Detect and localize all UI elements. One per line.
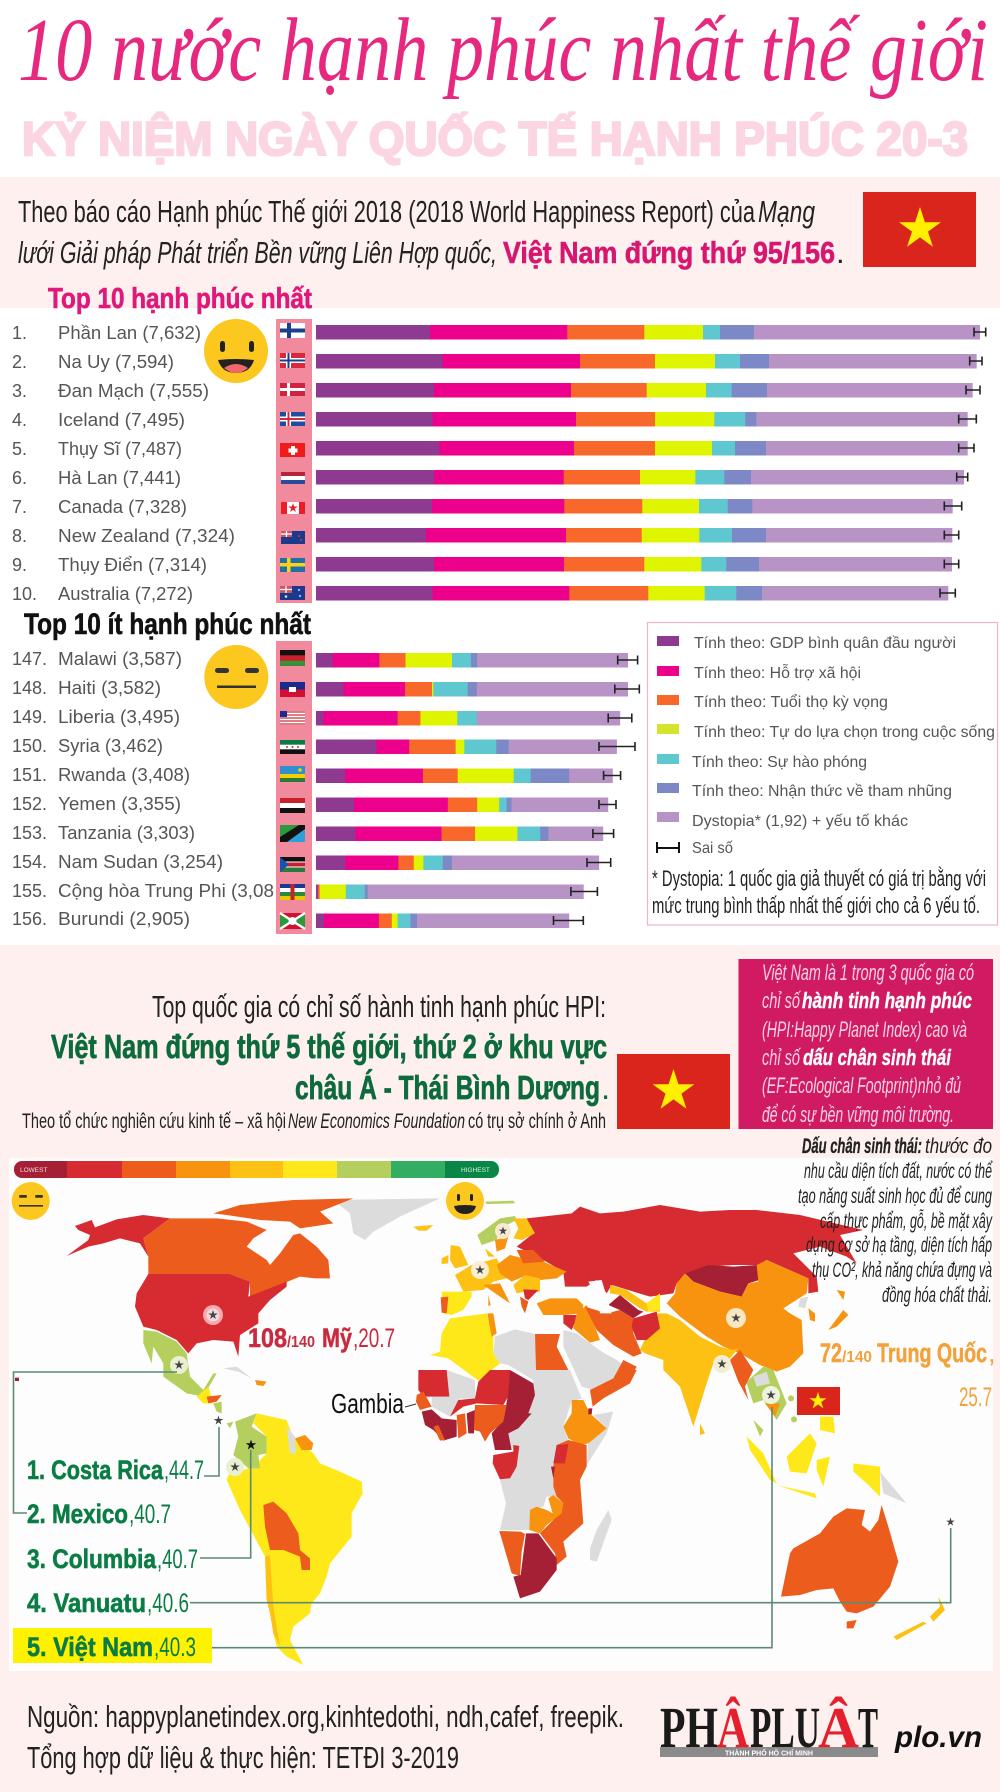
logo: Pháp Luật [660,1695,878,1760]
logo: Pháp Luật: Â [717,1695,749,1760]
panel: least happy country list: 151. [12,765,47,785]
heading: HPI section [22,989,610,1133]
bar: Thụy Sĩ [316,441,974,456]
panel: least happy country list: Tanzania (3,303) [58,823,195,843]
flag: Sweden [280,558,305,572]
panel: happiest country list: 9. [12,555,27,575]
panel: least happy country list: Cộng hòa Trung Phi (3,08 [58,881,274,901]
panel: happiest country list: 7. [12,497,27,517]
flag: Switzerland [280,443,305,457]
grey Africa [500,1370,582,1530]
flag: Iceland [280,412,305,426]
panel: happiest country list: 6. [12,468,27,488]
intro text block: Mạng [758,194,815,229]
panel: least happy country list: 156. [12,909,47,929]
chart: stacked bars top 10 [316,325,986,600]
logo: Pháp Luật: PH [660,1695,718,1760]
intro text block [18,194,845,270]
panel: happiest country list: Hà Lan (7,441) [58,468,181,488]
color scale bar: LOWEST [20,1167,47,1174]
legend: corruption: Tính theo: Nhận thức về tham nhũng [692,783,952,800]
Russia [517,1205,863,1297]
map markers [170,1223,955,1526]
Ethiopia [563,1400,607,1445]
heading: HPI section: Top quốc gia có chỉ số hành tinh hạnh phúc HPI: [152,989,606,1024]
flag: Liberia [280,711,305,725]
flag: Finland [280,323,305,338]
panel: least happy country list: 150. [12,736,47,756]
flag column top 10 [276,319,312,603]
connector: Colombia [200,1450,251,1558]
color scale bar: HIGHEST [461,1167,490,1174]
bar: Hà Lan [316,470,968,484]
bar: Malawi [316,653,638,668]
South Africa [513,1533,557,1598]
France Germany [455,1258,507,1292]
Niger [450,1370,510,1417]
flag column bottom 10 [276,641,312,934]
panel: least happy country list: Yemen (3,355) [58,794,181,814]
Balkans [523,1289,538,1300]
panel: happiest country list: 10. [12,584,37,604]
bar: Rwanda [316,768,621,783]
legend note [652,866,986,918]
chart: stacked bars bottom 10 [316,653,639,928]
Afghanistan [632,1312,660,1340]
world map [15,1198,945,1665]
heading: HPI section: châu Á - Thái Bình Dương [295,1069,600,1106]
connector: Vanuatu [190,1528,951,1603]
panel: happiest country list: Australia (7,272) [58,584,193,604]
heading: top 10 least happy: Top 10 ít hạnh phúc nhất [24,608,311,641]
label: China: , [988,1338,996,1368]
Mexico [143,1330,217,1397]
panel: least happy country list: Liberia (3,495) [58,707,180,727]
East Africa [540,1440,587,1565]
map: Sub-Saharan Africa [416,1370,637,1598]
callout: Vietnam HPI: dấu chân sinh thái [803,1045,952,1070]
bar: Syria [316,740,635,754]
panel: happiest country list: 5. [12,439,27,459]
bar: Đan Mạch [316,383,980,398]
Senegal Gambia [416,1392,432,1410]
Yemen south coast [590,1370,637,1407]
Mali [432,1370,475,1417]
rank 2: ,40.7 [129,1499,171,1529]
legend: generosity: Tính theo: Sự hào phóng [692,754,867,771]
Canada [143,1218,330,1297]
bar: Na Uy [316,354,982,368]
legend: freedom: Tính theo: Tự do lựa chọn trong cuộc sống [694,724,995,741]
Indonesia [747,1417,907,1503]
logo: Pháp Luật: PLU [750,1695,820,1760]
bar: Yemen [316,798,616,812]
Mongolia [685,1265,770,1297]
icon: Vietnam flag [863,192,976,267]
India [640,1313,738,1427]
bar: Nam Sudan [316,856,611,870]
Guyana [287,1427,296,1453]
rank 3: 3. Columbia [27,1544,157,1574]
icon: happy face small [446,1182,484,1220]
map: Australia and New Zealand [781,1505,945,1640]
connector: Vietnam [212,1407,772,1648]
rank 1: 1. Costa Rica [27,1455,164,1485]
Guinea [422,1409,457,1441]
map: Europe, Middle East, North Africa [413,1201,660,1390]
Bolivia [263,1502,310,1570]
Turkey [537,1298,583,1315]
icon: neutral face [204,645,268,709]
panel: happiest country list: 3. [12,381,27,401]
label: USA: /140 [287,1334,315,1351]
footer sources: Tổng hợp dữ liệu & thực hiện: TETĐI 3-2019 [27,1740,459,1775]
Colombia [233,1413,267,1468]
bar: Iceland [316,412,976,426]
bar: Thụy Điển [316,557,959,572]
panel: least happy country list: 152. [12,794,47,814]
panel: least happy country list: Rwanda (3,408) [58,765,190,785]
China [667,1260,808,1372]
heading: HPI section: Theo tổ chức nghiên cứu kinh tế – xã hội [22,1110,286,1133]
panel: happiest country list: 8. [12,526,27,546]
panel: least happy country list: 149. [12,707,47,727]
panel: happiest country list: Thụy Điển (7,314) [58,555,207,575]
flag: South Sudan [280,857,305,872]
panel: least happy country list: 154. [12,852,47,872]
panel: happiest country list: Phần Lan (7,632) [58,323,201,343]
icon: happy face [204,319,268,383]
icon: neutral face small [12,1182,50,1220]
connector: Mexico [14,1372,177,1513]
rank 4: ,40.6 [147,1588,189,1618]
flag: Netherlands [281,472,305,484]
flag: Denmark [280,383,305,396]
flag: Yemen [280,798,305,813]
heading: HPI section: Việt Nam đứng thứ 5 thế giới, thứ 2 ở khu vực [51,1028,607,1065]
Zambia [529,1495,563,1533]
Sahara grey [493,1329,577,1390]
Congo [493,1445,519,1479]
Ghana [457,1413,467,1438]
Italy [483,1283,510,1303]
bar: Phần Lan [316,325,986,340]
intro text block: lưới Giải pháp Phát triển Bền vững Liên Hợp quốc, [18,235,497,270]
label: China [820,1338,996,1412]
bar: Cộng hòa Trung Phi [316,884,597,899]
map: South America [227,1413,363,1665]
Central Asia [610,1285,660,1312]
rank 3: ,40.7 [157,1544,198,1574]
color scale bar [14,1161,499,1178]
Suriname [295,1435,313,1450]
panel: least happy country list: 147. [12,649,47,669]
flag: Rwanda [280,766,305,782]
legend: GDP: Tính theo: GDP bình quân đầu người [694,635,956,652]
Mauritania [418,1370,449,1397]
Arabia [563,1330,627,1390]
logo: plo.vn: plo.vn [894,1721,982,1754]
highlight: Vietnam label [13,1628,212,1663]
Arctic islands [213,1198,353,1228]
logo: Pháp Luật: THÀNH PHỐ HỒ CHÍ MINH [725,1748,813,1758]
Namibia [499,1531,525,1576]
connector: Costa Rica [204,1427,219,1476]
intro text block: Việt Nam đứng thứ 95/156 [503,235,835,270]
callout: Vietnam HPI: chỉ số [762,1045,801,1070]
Egypt [535,1334,568,1370]
label: USA [248,1323,395,1353]
Japan Korea [798,1290,848,1330]
flag: Central African Republic [280,884,305,900]
map: North and Central America [15,1198,440,1428]
panel: least happy country list: 148. [12,678,47,698]
Oman Yemen [590,1360,637,1390]
panel: least happy country list: Malawi (3,587) [58,649,182,669]
icon: Vietnam flag small [797,1387,840,1415]
flag: New Zealand [281,531,305,544]
label: USA: Mỹ [322,1323,352,1353]
UK Ireland [450,1245,468,1268]
Iraq [573,1305,600,1343]
bar: Liberia [316,711,632,726]
panel: happiest country list: Na Uy (7,594) [58,352,174,372]
rank 1: ,44.7 [164,1455,204,1485]
panel: least happy country list: Haiti (3,582) [58,678,161,698]
Caspian [588,1280,612,1313]
label: Gambia: Gambia [331,1388,404,1419]
Algeria [417,1313,500,1381]
bar: Haiti [316,682,639,696]
panel: happiest country list: New Zealand (7,324) [58,526,235,546]
heading: top 10 happiest: Top 10 hạnh phúc nhất [48,283,312,315]
panel: happiest country list: 4. [12,410,27,430]
Greenland [333,1198,440,1240]
flag: Burundi [280,913,305,929]
icon: Vietnam flag large [617,1054,730,1129]
callout: Vietnam HPI: chỉ số [762,988,801,1013]
bar: Burundi [316,914,583,928]
panel: least happy country list: Burundi (2,905) [58,909,190,929]
heading: HPI section: có trụ sở chính ở Anh [468,1110,606,1133]
legend: life expectancy: Tính theo: Tuổi thọ kỳ vọng [694,693,888,711]
Spain [442,1292,472,1315]
list: top 5 HPI countries [27,1455,204,1662]
map background [9,1158,993,1671]
panel: happiest country list: 1. [12,323,27,343]
panel: least happy country list: 153. [12,823,47,843]
panel: least happy country list: 155. [12,881,47,901]
bar: Australia [316,586,955,600]
label: China: /140 [842,1349,872,1366]
Chad [492,1370,535,1450]
rank 5: ,40.3 [154,1632,196,1662]
Scandinavia [477,1216,517,1245]
heading: HPI section: New Economics Foundation [288,1110,465,1133]
flag: Tanzania [280,825,305,842]
flag: Norway [280,353,305,368]
flag: Australia [280,586,305,600]
heading: HPI section: . [601,1069,610,1106]
rank 4: 4. Vanuatu [27,1588,146,1618]
panel: happiest country list: Đan Mạch (7,555) [58,381,209,401]
Iran [585,1307,642,1357]
label: USA: ,20.7 [353,1323,395,1353]
label: USA: 108 [248,1323,287,1353]
logo: Pháp Luật: Â [818,1695,859,1760]
flag: Syria [280,740,305,754]
legend: error: Sai số [692,840,733,857]
flag: Malawi [280,650,305,666]
map: Russia and Asia [517,1205,907,1503]
flag: Haiti [280,682,305,697]
legend: social support: Tính theo: Hỗ trợ xã hội [694,663,861,682]
label: China: 72 [820,1338,842,1368]
bar: Tanzania [316,826,614,841]
footer sources [27,1699,624,1775]
flag: Canada [281,502,305,514]
panel: least happy country list: Syria (3,462) [58,736,163,756]
panel: happiest country list: Iceland (7,495) [58,410,185,430]
logo: Pháp Luật: T [858,1695,878,1760]
Madagascar [590,1510,612,1562]
footer sources: Nguồn: happyplanetindex.org,kinhtedothi, ndh,cafef, freepik. [27,1699,624,1734]
Alaska [67,1215,170,1257]
panel: happiest country list: 2. [12,352,27,372]
intro text block: . [836,235,845,270]
legend: error [657,840,733,857]
callout: Vietnam HPI [738,959,993,1129]
Poland Ukraine [497,1255,567,1282]
subtitle: KỶ NIỆM NGÀY QUỐC TẾ HẠNH PHÚC 20-3 [22,112,968,165]
text block: ecological footprint definition [798,1135,993,1307]
panel: least happy country list [12,649,274,929]
rank 2: 2. Mexico [27,1499,128,1529]
Chile [265,1555,280,1647]
Southeast Asia [730,1350,797,1437]
USA [135,1274,287,1357]
panel: happiest country list: Canada (7,328) [58,497,187,517]
bar: Canada [316,499,962,514]
bar: New Zealand [316,528,959,542]
Central America [15,1367,267,1428]
panel: happiest country list: Thụy Sĩ (7,487) [58,439,182,459]
panel: happiest country list [12,323,235,604]
legend: dystopia: Dystopia* (1,92) + yếu tố khác [692,813,908,830]
rank 5: 5. Việt Nam [27,1632,153,1662]
Somalia [587,1412,613,1465]
legend panel [648,622,998,925]
panel: least happy country list: Nam Sudan (3,254) [58,852,223,872]
Syria [563,1315,578,1330]
Nigeria [474,1405,507,1442]
text block: ecological footprint definition: Dấu chân sinh thái: [802,1135,922,1158]
